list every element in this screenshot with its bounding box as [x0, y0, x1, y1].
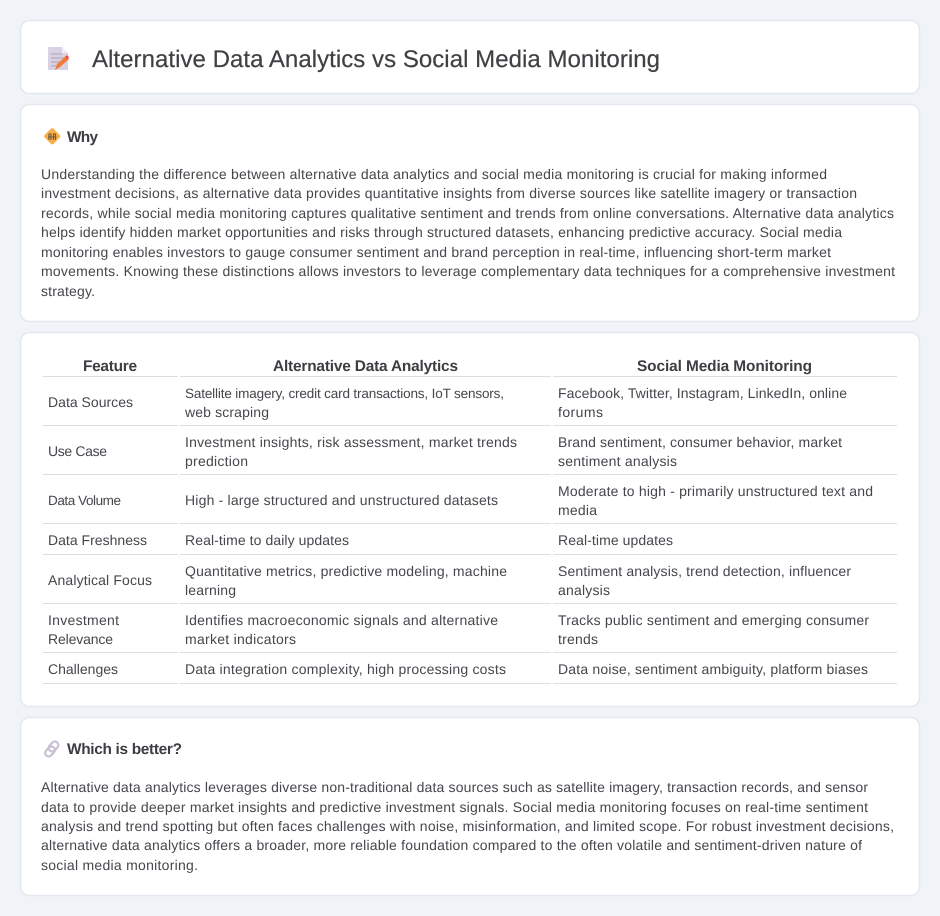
- icon: chain link: [44, 740, 60, 758]
- row: investment relevance: market indicators: [185, 631, 296, 647]
- heading: why: Why: [67, 129, 98, 146]
- row: investment relevance: [43, 612, 897, 653]
- row: analytical focus: Quantitative metrics, predictive modeling, machine: [185, 563, 507, 579]
- row: data sources: Satellite imagery, credit card transactions, IoT sensors,: [185, 386, 504, 401]
- row: analytical focus: learning: [185, 582, 236, 598]
- row: investment relevance: Tracks public sentiment and emerging consumer: [558, 612, 869, 628]
- row: data freshness: Real-time updates: [558, 532, 673, 548]
- row: use case: Investment insights, risk assessment, market trends: [185, 434, 517, 450]
- row: data volume: [43, 483, 897, 524]
- row: analytical focus: analysis: [558, 582, 610, 598]
- text block: why paragraph: investment decisions, as alternative data provides quantitative insights from diverse sources like satellite imagery or transaction: [41, 185, 857, 201]
- row: data freshness: Real-time to daily updates: [185, 532, 349, 548]
- title: Alternative Data Analytics vs Social Media Monitoring: [92, 46, 660, 73]
- row: data volume: Moderate to high - primarily unstructured text and: [558, 483, 873, 499]
- row: investment relevance: Investment: [48, 612, 119, 628]
- row: data freshness: Data Freshness: [48, 532, 147, 548]
- row: data sources: forums: [558, 404, 603, 420]
- row: analytical focus: [43, 563, 897, 604]
- row: data sources: [43, 385, 897, 426]
- row: investment relevance: Relevance: [48, 631, 113, 647]
- text block: why paragraph: records, while social media monitoring captures qualitative sentiment and trends from online conversations. Alternative data analytics: [41, 205, 894, 221]
- row: use case: Use Case: [48, 443, 107, 459]
- row: investment relevance: trends: [558, 631, 598, 647]
- row: challenges: Data noise, sentiment ambiguity, platform biases: [558, 661, 868, 677]
- row: data volume: Data Volume: [48, 493, 121, 508]
- text block: why paragraph: strategy.: [41, 283, 95, 299]
- panel: header: [20, 20, 920, 94]
- table header row: Feature: [83, 358, 137, 375]
- text block: why paragraph: [41, 166, 895, 299]
- text block: verdict paragraph: [41, 779, 894, 873]
- panel: which is better: [20, 718, 920, 896]
- row: data sources: Facebook, Twitter, Instagram, LinkedIn, online: [558, 385, 847, 401]
- row: use case: Brand sentiment, consumer behavior, market: [558, 434, 842, 450]
- row: data volume: High - large structured and unstructured datasets: [185, 492, 498, 508]
- icon: warning diamond: [43, 127, 61, 145]
- row: challenges: Challenges: [48, 661, 118, 677]
- text block: why paragraph: Understanding the difference between alternative data analytics and social media monitoring is crucial for making informed: [41, 166, 827, 182]
- row: analytical focus: Sentiment analysis, trend detection, influencer: [558, 563, 851, 579]
- icon: document with pencil: [48, 47, 69, 70]
- text block: why paragraph: helps identify hidden market opportunities and risks through structured datasets, enhancing predictive accuracy. Social media: [41, 224, 842, 240]
- row: challenges: Data integration complexity, high processing costs: [185, 661, 506, 677]
- text block: verdict paragraph: analysis and trend spotting but often faces challenges with noise, misinformation, and limited scope. For robust investment decisions,: [41, 818, 894, 834]
- table header row: Alternative Data Analytics: [273, 358, 458, 375]
- row: use case: sentiment analysis: [558, 453, 677, 469]
- row: data volume: media: [558, 502, 597, 518]
- row: data sources: web scraping: [184, 404, 269, 420]
- text block: why paragraph: monitoring enables investors to gauge consumer sentiment and brand perception in real-time, influencing short-term market: [41, 244, 831, 260]
- row: data freshness: [43, 532, 897, 555]
- panel: comparison table: [20, 332, 920, 706]
- heading: which is better: Which is better?: [67, 741, 182, 758]
- text block: verdict paragraph: alternative data analytics offers a broader, more reliable foundation compared to the often volatile and sentiment-driven nature of: [41, 837, 862, 853]
- text block: why paragraph: movements. Knowing these distinctions allows investors to leverage complementary data techniques for a comprehensive investment: [41, 263, 895, 279]
- panel: why: [20, 104, 920, 322]
- row: use case: [43, 434, 897, 475]
- row: analytical focus: Analytical Focus: [48, 572, 152, 588]
- text block: verdict paragraph: data to provide deeper market insights and predictive investment signals. Social media monitoring focuses on real-time sentiment: [41, 799, 868, 815]
- row: data sources: Data Sources: [48, 394, 133, 410]
- row: investment relevance: Identifies macroeconomic signals and alternative: [185, 612, 498, 628]
- table header row: Social Media Monitoring: [637, 358, 812, 375]
- row: challenges: [43, 661, 897, 684]
- text block: verdict paragraph: Alternative data analytics leverages diverse non-traditional data sources such as satellite imagery, transaction records, and sensor: [41, 779, 868, 795]
- text block: verdict paragraph: social media monitoring.: [41, 857, 198, 873]
- table header row: [43, 358, 897, 377]
- row: use case: prediction: [185, 453, 248, 469]
